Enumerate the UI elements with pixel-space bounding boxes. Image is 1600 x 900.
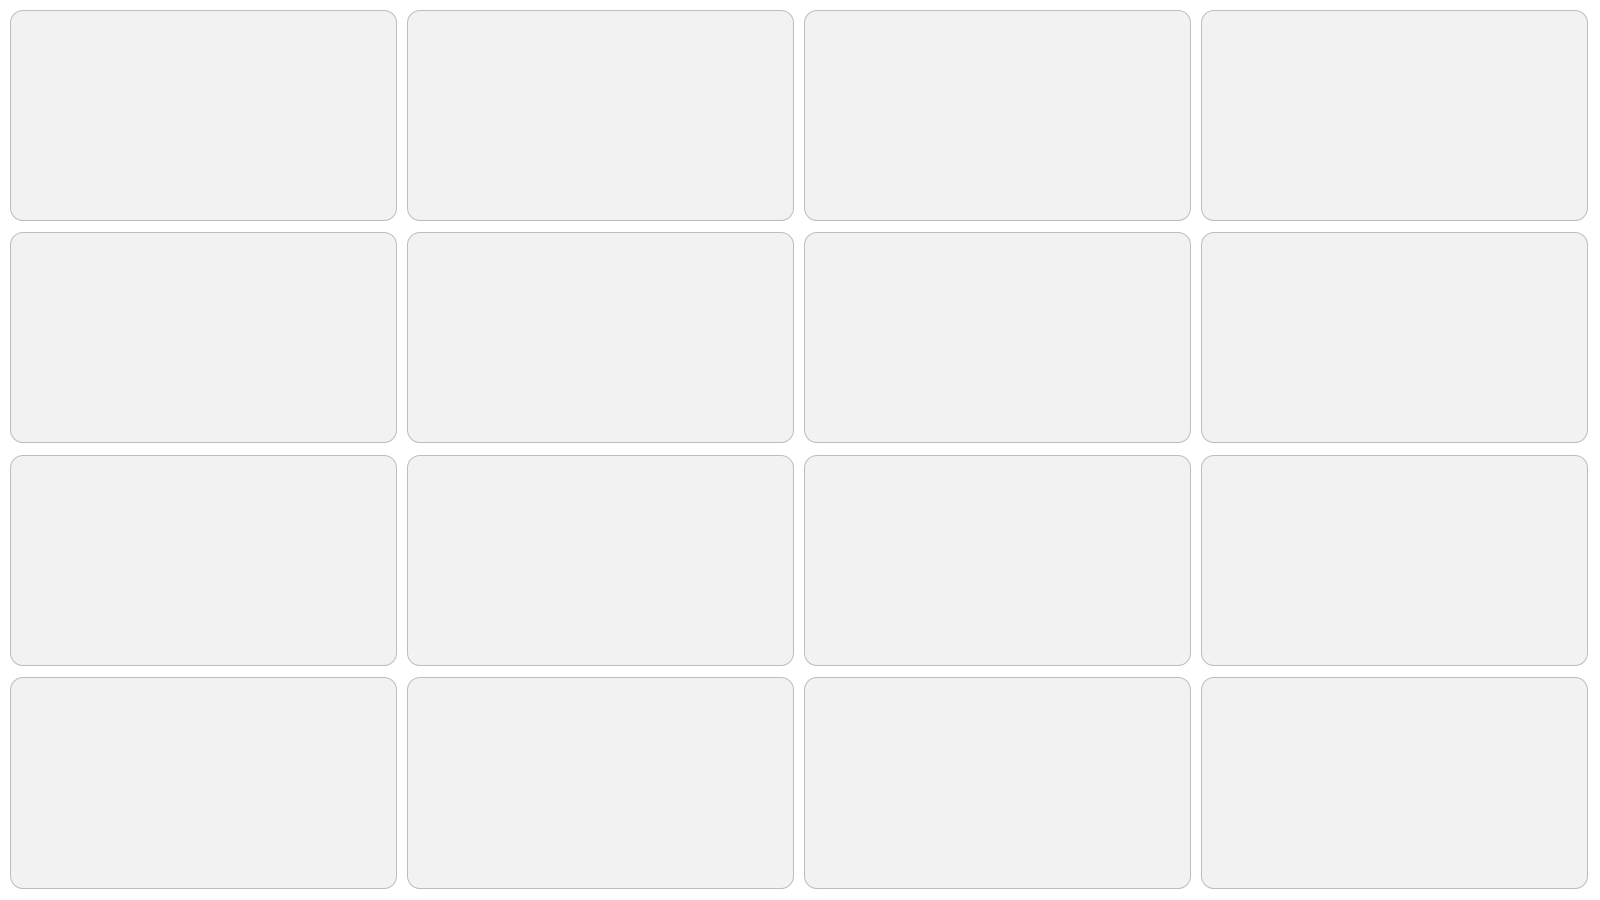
- panel: row 2 card 2: [407, 232, 794, 443]
- panel: row 1 card 2: [407, 10, 794, 221]
- panel: row 2 card 4: [1201, 232, 1588, 443]
- panel: row 4 card 2: [407, 677, 794, 889]
- panel: row 1 card 3: [804, 10, 1191, 221]
- panel: row 3 card 4: [1201, 455, 1588, 666]
- panel: row 3 card 3: [804, 455, 1191, 666]
- panel: row 3 card 2: [407, 455, 794, 666]
- panel: row 2 card 3: [804, 232, 1191, 443]
- panel: row 1 card 1: [10, 10, 397, 221]
- panel: row 4 card 3: [804, 677, 1191, 889]
- panel: row 4 card 4: [1201, 677, 1588, 889]
- panel: row 1 card 4: [1201, 10, 1588, 221]
- panel: row 3 card 1: [10, 455, 397, 666]
- panel: row 2 card 1: [10, 232, 397, 443]
- panel: row 4 card 1: [10, 677, 397, 889]
